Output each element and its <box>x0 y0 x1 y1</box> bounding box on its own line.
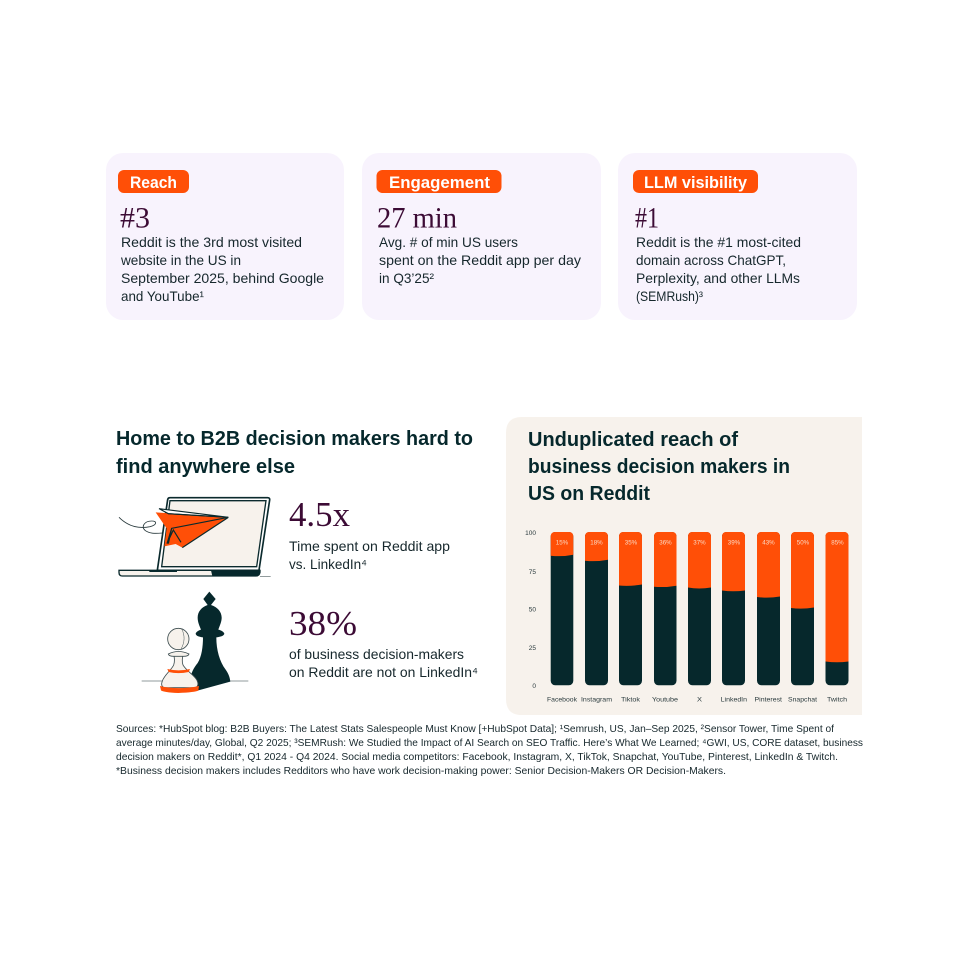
panel: engagement card: Engagement <box>389 173 490 192</box>
bar: Facebook <box>547 532 578 704</box>
bar: LinkedIn: 39% <box>728 540 741 546</box>
bar: Twitch: Twitch <box>827 696 847 704</box>
bar: Facebook: Facebook <box>547 696 578 704</box>
stat: 38% not on LinkedIn: 38% <box>289 604 357 643</box>
panel: engagement card: in Q3’25² <box>379 270 434 286</box>
panel: LLM visibility card: #1 <box>635 202 659 234</box>
bar: LinkedIn: LinkedIn <box>721 696 747 704</box>
bar: X: 37% <box>693 540 706 546</box>
y axis labels: 25 <box>529 645 536 652</box>
chart heading: US on Reddit <box>528 482 650 505</box>
heading: B2B decision makers: Home to B2B decision makers hard to <box>116 427 473 450</box>
panel: reach card <box>106 153 344 320</box>
stat: 4.5x time spent: vs. LinkedIn⁴ <box>289 556 367 572</box>
panel: LLM visibility card: Perplexity, and other LLMs <box>636 270 800 286</box>
y axis labels: 75 <box>529 569 536 576</box>
bar: Tiktok <box>619 532 642 704</box>
bar: Tiktok: 35% <box>625 540 638 546</box>
bar: Twitch <box>826 532 848 704</box>
y axis labels: 0 <box>532 683 536 690</box>
panel: reach card: Reddit is the 3rd most visited <box>121 234 302 250</box>
heading: B2B decision makers <box>116 427 473 478</box>
panel: LLM visibility card: Reddit is the #1 most-cited <box>636 234 801 250</box>
text block: sources footnote: *Business decision makers includes Redditors who have work decision-making power: Senior Decision-Makers OR Decision-Makers. <box>116 766 726 777</box>
bar: Pinterest <box>754 532 782 704</box>
bar: Pinterest: 43% <box>762 540 775 546</box>
bar: Facebook: 15% <box>556 540 569 546</box>
text block: sources footnote: Sources: *HubSpot blog: B2B Buyers: The Latest Stats Salespeople Must Know [+HubSpot Data]; ¹Semrush, US, Jan–Sep 2025, ²Sensor Tower, Time Spent of <box>116 724 834 735</box>
stat: 38% not on LinkedIn <box>289 604 478 680</box>
icon: chess pawn with king shadow <box>142 592 248 693</box>
bar: Instagram: 18% <box>590 540 603 546</box>
bar: Snapchat: 50% <box>797 540 810 546</box>
text block: sources footnote: average minutes/day, Global, Q2 2025; ³SEMRush: We Studied the Impact of AI Search on SEO Traffic. Here’s What We Learned; ⁴GWI, US, CORE dataset, business <box>116 738 863 749</box>
bar: Tiktok: Tiktok <box>621 696 641 704</box>
panel: unduplicated reach chart <box>506 417 862 715</box>
chart heading <box>528 428 790 505</box>
bar: X <box>688 532 711 704</box>
bar: Youtube: Youtube <box>652 696 678 704</box>
stat: 4.5x time spent <box>289 495 450 572</box>
panel: engagement card <box>362 153 601 320</box>
stat: 38% not on LinkedIn: of business decision-makers <box>289 646 464 662</box>
chart heading: Unduplicated reach of <box>528 428 738 451</box>
text block: sources footnote <box>116 724 863 777</box>
heading: B2B decision makers: find anywhere else <box>116 455 295 478</box>
bar: LinkedIn <box>721 532 747 704</box>
panel: reach card: #3 <box>120 202 150 234</box>
bar: Instagram: Instagram <box>581 696 612 704</box>
chart heading: business decision makers in <box>528 455 790 478</box>
bar: Instagram <box>581 532 612 704</box>
panel: LLM visibility card: domain across ChatGPT, <box>636 252 786 268</box>
bar: Twitch: 85% <box>831 540 844 546</box>
panel: LLM visibility card <box>618 153 857 320</box>
bar: Pinterest: Pinterest <box>754 696 782 704</box>
panel: LLM visibility card: LLM visibility <box>644 173 748 192</box>
panel: reach card: Reach <box>130 173 177 192</box>
panel: engagement card: spent on the Reddit app per day <box>379 252 581 268</box>
text block: sources footnote: decision makers on Reddit*, Q1 2024 - Q4 2024. Social media competitors: Facebook, Instagram, X, TikTok, Snapchat, YouTube, Pinterest, LinkedIn & Twitch. <box>116 752 838 763</box>
bar: X: X <box>697 696 703 704</box>
bar: Youtube <box>652 532 678 704</box>
panel: reach card: and YouTube¹ <box>121 288 204 304</box>
panel: engagement card: 27 min <box>377 202 457 234</box>
y axis labels: 100 <box>525 530 536 537</box>
panel: reach card: September 2025, behind Google <box>121 270 324 286</box>
bar: Youtube: 36% <box>659 540 672 546</box>
panel: LLM visibility card: (SEMRush)³ <box>636 288 703 304</box>
y axis labels <box>525 530 536 690</box>
bar: Snapchat <box>788 532 817 704</box>
panel: engagement card: Avg. # of min US users <box>379 234 518 250</box>
y axis labels: 50 <box>529 606 536 614</box>
stat: 4.5x time spent: Time spent on Reddit app <box>289 538 450 554</box>
stat: 4.5x time spent: 4.5x <box>289 495 350 534</box>
icon: paper plane leaving laptop <box>119 498 271 576</box>
panel: reach card: website in the US in <box>120 252 241 268</box>
bar: Snapchat: Snapchat <box>788 696 817 704</box>
stat: 38% not on LinkedIn: on Reddit are not on LinkedIn⁴ <box>289 664 478 680</box>
